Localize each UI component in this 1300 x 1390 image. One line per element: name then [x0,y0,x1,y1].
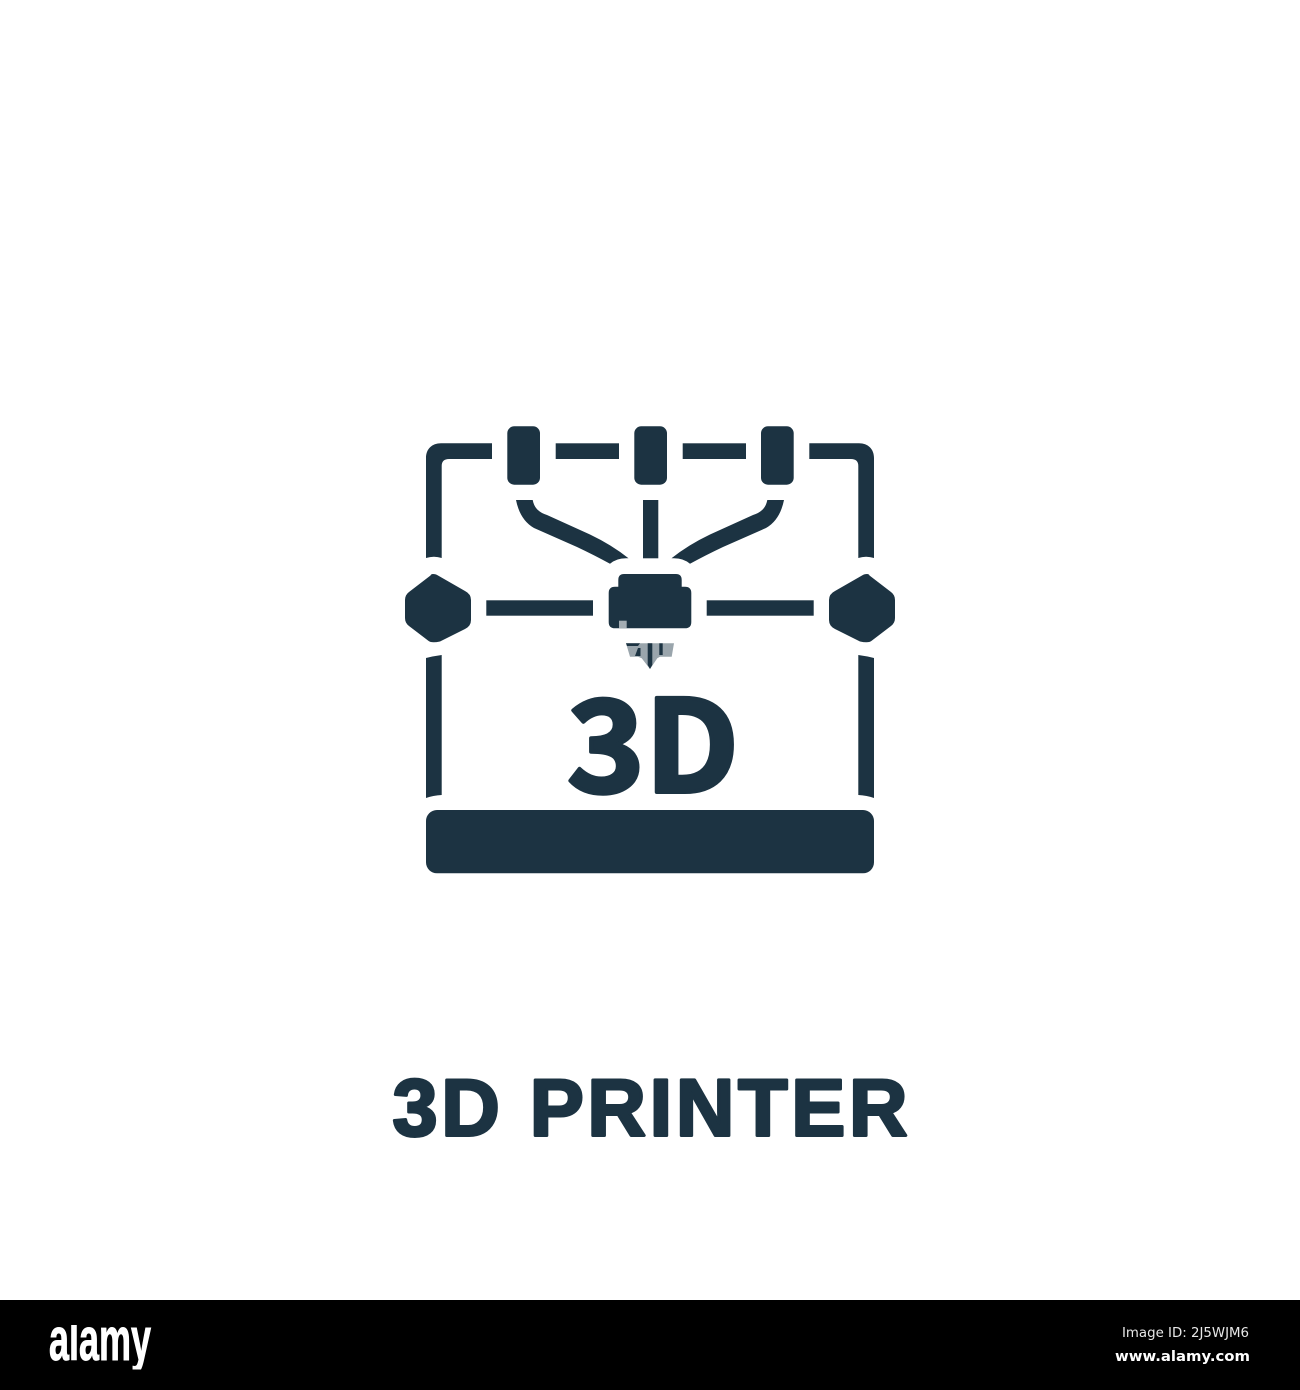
title: 3D PRINTER: 3D PRINTER [392,1064,908,1154]
icon label: 3D: 3D [567,645,739,829]
nozzle [626,643,674,669]
icon: 3D printer [405,426,895,873]
frame: top right corner [809,443,874,558]
horizontal rails [486,600,814,616]
right arm [672,500,784,564]
carriage blocks [507,426,794,485]
left hexagon joint [405,574,471,642]
footer image id: Image ID: 2J5WJM6 [1122,1325,1249,1341]
frame: lower legs [426,655,874,798]
footer bar [0,1300,1300,1390]
print head highlight [619,621,627,628]
frame: top left corner [426,443,492,558]
print head [609,574,691,628]
footer logo: alamy: alamy [49,1306,151,1373]
left arm [516,500,628,564]
right hexagon joint [829,574,895,642]
print bed [426,810,874,873]
center arm [643,500,658,558]
footer url: www.alamy.com [1115,1349,1250,1365]
frame: top rail segments [556,443,746,459]
